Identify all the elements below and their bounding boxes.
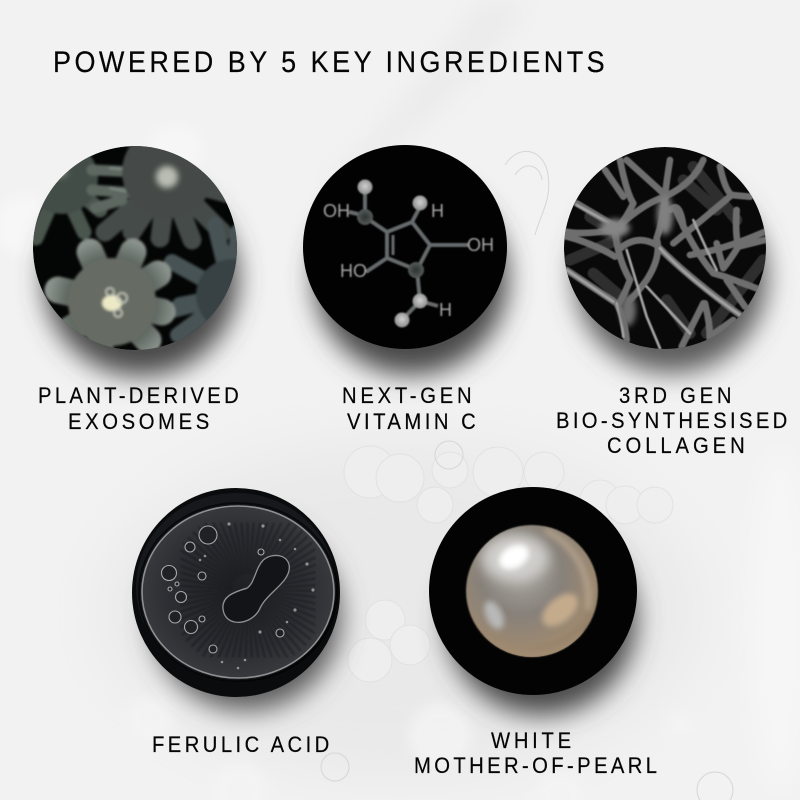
- panel: next-gen vitamin C: [303, 145, 508, 375]
- label: white mother-of-pearl: [414, 728, 657, 778]
- panel: ferulic acid: [132, 488, 341, 711]
- panel: collagen: [564, 147, 767, 373]
- icon: molecule: H: [431, 201, 444, 221]
- left flower: [36, 178, 100, 238]
- label: 3rd gen bio-synthesised collagen: [556, 383, 787, 458]
- blob: [223, 555, 289, 622]
- icon: molecule: HO: [340, 261, 367, 281]
- label: next-gen vitamin C: VITAMIN C: [347, 409, 476, 434]
- icon: black disc: [303, 145, 507, 349]
- icon: pearl shadow: [446, 525, 636, 715]
- lower left flower: [58, 252, 162, 345]
- label: next-gen vitamin C: NEXT-GEN: [342, 383, 472, 408]
- label: ferulic acid: FERULIC ACID: [152, 732, 329, 757]
- label: 3rd gen bio-synthesised collagen: BIO-SYNTHESISED: [556, 408, 787, 433]
- icon: ferulic acid shadow: [151, 521, 341, 711]
- icon: exosomes shadow: [44, 182, 238, 376]
- icon: molecule: OH: [323, 201, 350, 221]
- label: white mother-of-pearl: WHITE: [491, 728, 571, 753]
- upper flower: [105, 178, 234, 240]
- icon: pearl: [466, 525, 598, 657]
- icon: molecule: OH: [467, 235, 494, 255]
- label: plant-derived exosomes: EXOSOMES: [68, 409, 209, 434]
- label: 3rd gen bio-synthesised collagen: COLLAGEN: [607, 433, 745, 458]
- icon: black disc: [429, 487, 637, 695]
- icon: collagen shadow: [575, 181, 767, 373]
- panel: plant-derived exosomes: [26, 126, 268, 376]
- panel: white mother-of-pearl: [429, 487, 637, 715]
- label: plant-derived exosomes: PLANT-DERIVED: [38, 383, 239, 408]
- title: POWERED BY 5 KEY INGREDIENTS: [53, 46, 605, 79]
- icon: collagen fibre network: [564, 147, 766, 349]
- icon: vitamin C shadow: [314, 181, 508, 375]
- icon: petri dish: [132, 488, 340, 697]
- label: white mother-of-pearl: MOTHER-OF-PEARL: [414, 753, 657, 778]
- icon: exosomes micrograph: [33, 146, 237, 350]
- icon: molecule: H: [439, 300, 452, 320]
- label: plant-derived exosomes: [38, 383, 239, 434]
- icon: molecule: [323, 180, 494, 328]
- label: 3rd gen bio-synthesised collagen: 3RD GEN: [619, 383, 732, 408]
- right flower: [165, 225, 238, 335]
- label: next-gen vitamin C: [342, 383, 476, 434]
